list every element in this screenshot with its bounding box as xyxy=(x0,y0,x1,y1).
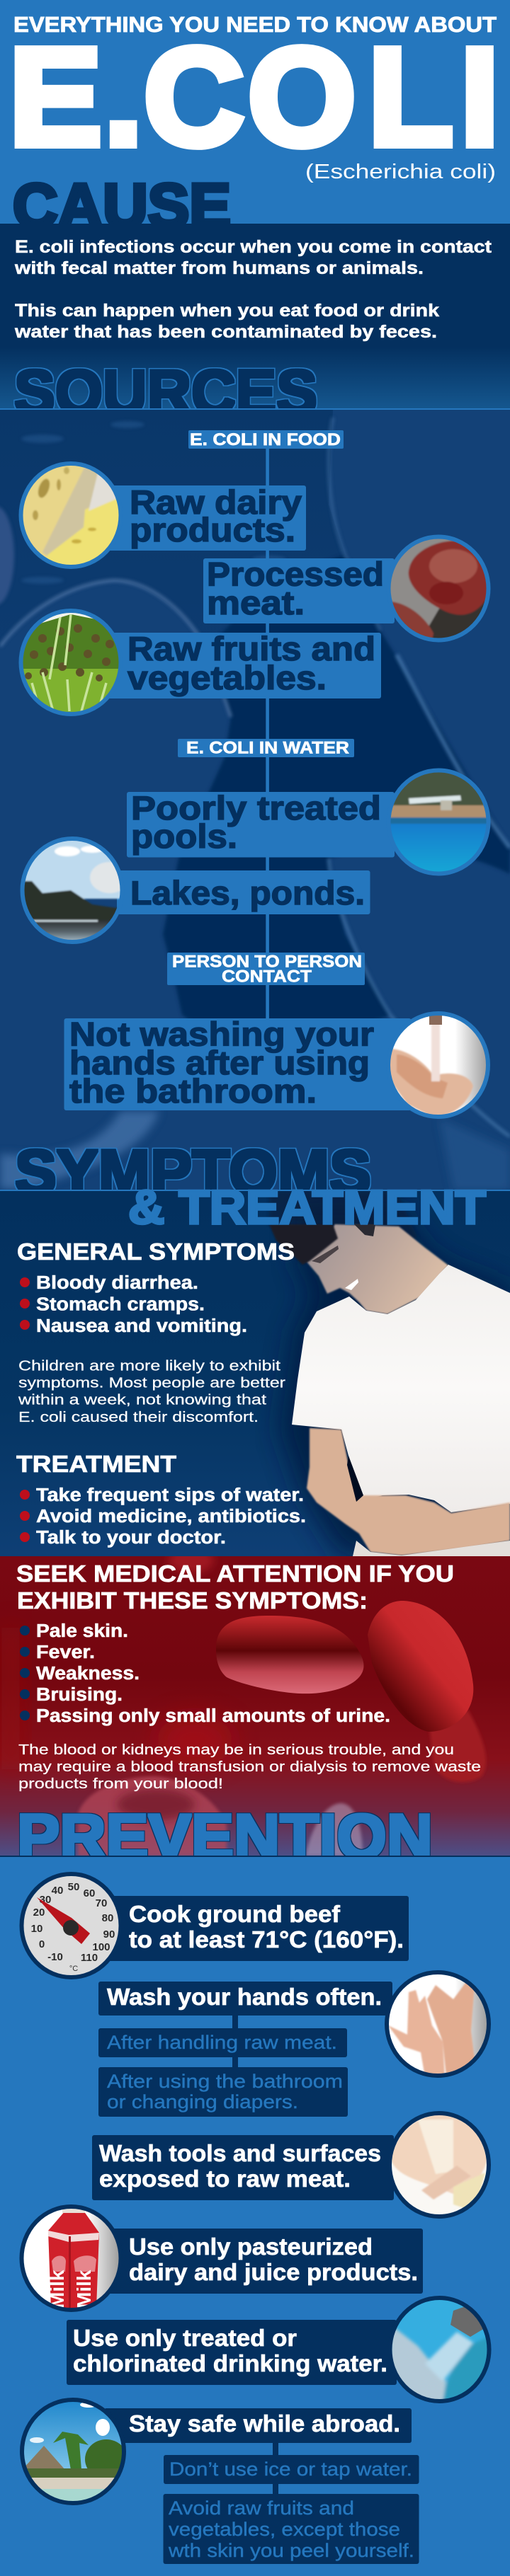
card: cook ground beef: to at least 71°C (160°F). xyxy=(129,1926,404,1953)
cause text: water that has been contaminated by feces. xyxy=(14,322,437,342)
sub-item: avoid raw fruits xyxy=(163,2494,419,2564)
icon: milk carton photo xyxy=(19,2204,124,2312)
card: not washing hands: hands after using xyxy=(69,1044,370,1081)
treatment list: Take frequent sips of water. xyxy=(36,1485,304,1505)
heading: & treatment: & TREATMENT xyxy=(128,1180,486,1234)
note on children: within a week, not knowing that xyxy=(18,1391,266,1408)
cause text: This can happen when you eat food or drink xyxy=(15,301,439,321)
icon: thermometer dial: 80 xyxy=(102,1912,113,1924)
panel: prevention xyxy=(19,1872,492,2564)
block: treatment: TREATMENT xyxy=(16,1451,177,1478)
heading: sources: SOURCES xyxy=(14,357,317,427)
treatment list: Talk to your doctor. xyxy=(36,1528,226,1548)
card: raw dairy: products. xyxy=(130,511,295,548)
cause text xyxy=(14,237,492,342)
card: pasteurized products xyxy=(19,2204,423,2312)
card: treated drinking water xyxy=(67,2296,492,2403)
label: e. coli in food: E. COLI IN FOOD xyxy=(190,430,341,449)
header rule xyxy=(0,1856,510,1857)
severe symptoms list: Passing only small amounts of urine. xyxy=(36,1706,390,1726)
icon: thermometer dial: 30 xyxy=(40,1894,51,1906)
card: stay safe abroad xyxy=(20,2399,419,2564)
card: pasteurized products: Use only pasteurized xyxy=(129,2233,373,2260)
icon: thermometer dial: 10 xyxy=(31,1923,42,1935)
card: treated drinking water: Use only treated or xyxy=(73,2325,297,2351)
icon: thermometer dial xyxy=(19,1872,124,1979)
symptoms list: Bloody diarrhea. xyxy=(36,1273,198,1293)
note on children xyxy=(18,1357,285,1425)
icon: thermometer dial: 90 xyxy=(103,1928,115,1940)
header rule xyxy=(0,408,510,410)
card: not washing hands: Not washing your xyxy=(69,1015,374,1053)
card: poorly treated pools xyxy=(127,768,492,878)
severe symptoms list: Weakness. xyxy=(36,1664,140,1684)
warning text: products from your blood! xyxy=(18,1776,223,1792)
heading: cause: CAUSE xyxy=(13,171,231,241)
label: person to person contact: PERSON TO PERSON xyxy=(172,953,362,971)
card: processed meat xyxy=(203,534,492,645)
block: general symptoms xyxy=(17,1239,295,1425)
card: wash tools and surfaces: Wash tools and surfaces xyxy=(99,2140,381,2166)
card: wash tools and surfaces xyxy=(92,2112,492,2219)
sub-item: no ice or tap water: Don’t use ice or tap water. xyxy=(169,2459,412,2480)
cause background xyxy=(0,224,510,358)
icon: sprouts photo xyxy=(18,609,125,719)
card: poorly treated pools: Poorly treated xyxy=(131,789,381,827)
bacteria photo background xyxy=(0,409,510,1190)
icon: open hands photo xyxy=(386,1971,492,2077)
sub-item: avoid raw fruits: vegetables, except those xyxy=(169,2519,400,2540)
card: poorly treated pools: pools. xyxy=(131,817,237,855)
icon: thermometer dial: 100 xyxy=(92,1941,110,1953)
icon: meat photo xyxy=(386,534,492,645)
card: treated drinking water: chlorinated drinking water. xyxy=(73,2350,387,2376)
heading: seek medical attention xyxy=(16,1561,454,1614)
cause text: E. coli infections occur when you come in contact xyxy=(15,237,492,257)
icon: thermometer dial: 70 xyxy=(96,1897,107,1909)
icon: milk carton photo: Milk xyxy=(73,2270,95,2308)
panel: symptoms and treatment xyxy=(0,1180,510,1556)
card: raw dairy xyxy=(18,460,306,570)
cause text: with fecal matter from humans or animals. xyxy=(14,258,424,278)
icon: milk carton photo: Milk xyxy=(46,2270,68,2308)
header rule xyxy=(0,1190,510,1191)
panel: cause xyxy=(0,181,510,347)
icon: lake photo xyxy=(20,839,130,964)
icon: pool photo xyxy=(386,768,492,878)
treatment list xyxy=(20,1485,306,1548)
note on children: symptoms. Most people are better xyxy=(18,1374,285,1391)
sources header band xyxy=(0,347,510,409)
card: cook ground beef: Cook ground beef xyxy=(129,1901,341,1927)
severe symptoms list: Bruising. xyxy=(36,1685,123,1705)
sub-item: avoid raw fruits: wth skin you peel yourself. xyxy=(168,2540,414,2561)
sub-item: after handling raw meat: After handling raw meat. xyxy=(107,2032,337,2053)
warning text: The blood or kidneys may be in serious trouble, and you xyxy=(18,1742,454,1758)
card: raw dairy: Raw dairy xyxy=(130,483,302,521)
card: raw fruits and vegetables: Raw fruits and xyxy=(128,630,375,667)
note on children: Children are more likely to exhibit xyxy=(18,1357,280,1374)
icon: thermometer dial: 50 xyxy=(68,1881,79,1893)
connector xyxy=(273,2443,278,2495)
heading: seek medical attention: EXHIBIT THESE SYMPTOMS: xyxy=(17,1588,368,1614)
card: processed meat: Processed xyxy=(207,555,384,593)
sub-item: after using the bathroom: After using the bathroom xyxy=(107,2071,343,2092)
icon: thermometer dial: 60 xyxy=(84,1887,95,1899)
label: person to person contact: CONTACT xyxy=(222,967,312,987)
card: not washing hands xyxy=(64,1011,492,1118)
icon: raw chicken photo xyxy=(387,2112,492,2219)
icon: thermometer dial: 40 xyxy=(52,1885,63,1897)
heading: symptoms: SYMPTOMS xyxy=(15,1137,371,1207)
timeline connector xyxy=(266,449,269,1018)
card: raw fruits and vegetables xyxy=(18,609,381,719)
icon: cheese photo xyxy=(18,460,125,570)
sub-item: after using the bathroom xyxy=(98,2067,348,2117)
icon: thermometer dial: 110 xyxy=(81,1952,98,1964)
card: cook ground beef xyxy=(19,1872,409,1979)
card: lakes, ponds xyxy=(20,839,370,964)
icon: thermometer dial: 0 xyxy=(39,1938,45,1950)
note on children: E. coli caused their discomfort. xyxy=(18,1409,259,1425)
symptoms list: Stomach cramps. xyxy=(36,1295,205,1315)
icon: thermometer dial: °C xyxy=(69,1965,78,1973)
panel: seek medical attention xyxy=(0,1548,510,1871)
card: stay safe abroad: Stay safe while abroad. xyxy=(129,2410,400,2437)
severe symptoms list xyxy=(20,1621,390,1726)
card: pasteurized products: dairy and juice products. xyxy=(129,2259,418,2285)
icon: thermometer dial: 20 xyxy=(33,1907,45,1919)
severe symptoms list: Pale skin. xyxy=(36,1621,128,1641)
illustration: blood cells xyxy=(0,1548,486,1856)
sub-item: after using the bathroom: or changing diapers. xyxy=(107,2091,298,2112)
label: e. coli in water: E. COLI IN WATER xyxy=(186,739,349,757)
card: wash your hands: Wash your hands often. xyxy=(107,1984,382,2010)
sub-item: avoid raw fruits: Avoid raw fruits and xyxy=(169,2497,354,2519)
card: lakes, ponds: Lakes, ponds. xyxy=(130,874,365,912)
icon: tap water photo xyxy=(388,2296,492,2403)
warning text: may require a blood transfusion or dialysis to remove waste xyxy=(18,1759,481,1775)
scientific name: (Escherichia coli) xyxy=(305,161,496,183)
card: processed meat: meat. xyxy=(207,584,305,621)
severe symptoms list: Fever. xyxy=(36,1643,95,1662)
connector xyxy=(232,2016,238,2067)
title block xyxy=(9,13,499,183)
icon: washing hands photo xyxy=(386,1011,492,1118)
icon: thermometer dial: -10 xyxy=(47,1951,63,1963)
figure: man holding stomach xyxy=(269,1191,510,1556)
heading: prevention: PREVENTION xyxy=(17,1801,433,1871)
sub-item: after handling raw meat xyxy=(98,2028,347,2057)
warning text xyxy=(18,1742,481,1792)
heading: seek medical attention: SEEK MEDICAL ATTENTION IF YOU xyxy=(16,1561,454,1587)
panel: sources xyxy=(0,347,510,1207)
icon: beach photo xyxy=(20,2399,130,2505)
block: treatment xyxy=(16,1451,306,1548)
red background xyxy=(0,1556,510,1856)
panel background xyxy=(0,1191,510,1556)
card: wash tools and surfaces: exposed to raw meat. xyxy=(99,2166,351,2192)
symptoms list: Nausea and vomiting. xyxy=(36,1316,247,1336)
main title: E.COLI xyxy=(9,20,499,174)
card: wash your hands xyxy=(98,1971,492,2117)
treatment list: Avoid medicine, antibiotics. xyxy=(36,1507,306,1526)
kicker line: EVERYTHING YOU NEED TO KNOW ABOUT xyxy=(13,13,497,37)
sub-item: no ice or tap water xyxy=(164,2455,419,2484)
card: raw fruits and vegetables: vegetables. xyxy=(128,659,327,696)
block: general symptoms: GENERAL SYMPTOMS xyxy=(17,1239,295,1265)
card: not washing hands: the bathroom. xyxy=(69,1072,317,1110)
label: person to person contact xyxy=(167,953,365,987)
symptoms list xyxy=(20,1273,247,1336)
